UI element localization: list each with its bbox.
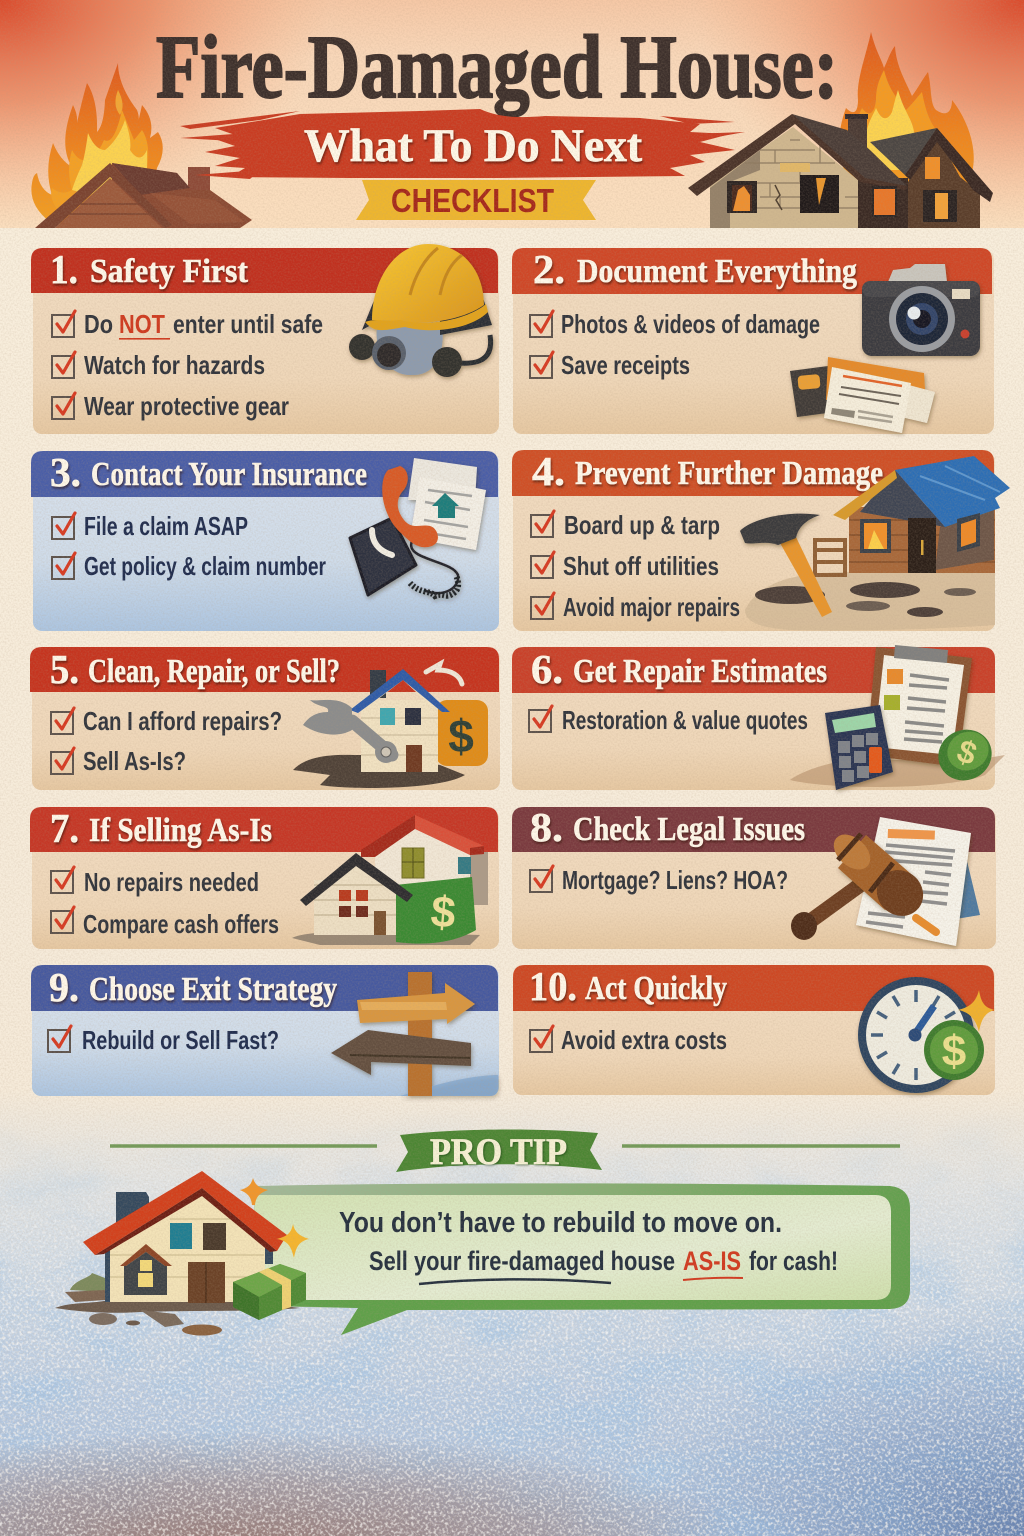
checklist: Restoration & value quotes [562,705,808,735]
checklist [530,865,788,895]
speech bubble [250,1183,910,1335]
heading: Clean, Repair, or Sell? [88,653,340,690]
subtitle: What To Do Next [304,120,642,172]
icon: two houses and cash: $ [429,887,458,938]
subtitle brush stroke [180,109,745,179]
ground [55,1300,300,1313]
heading: Choose Exit Strategy [89,971,337,1008]
header bar [30,647,499,692]
page background [0,1118,1024,1536]
checklist: Mortgage? Liens? HOA? [562,865,788,895]
header bar [512,807,995,852]
heading: 1. [50,246,78,292]
heading [50,449,367,495]
heading [532,448,883,494]
icon: camera [862,264,980,356]
checklist: Avoid major repairs [563,592,740,622]
heading: 4. [532,448,565,494]
icon: house wrench money [293,664,488,788]
checklist [51,867,279,939]
heading: 8. [530,804,563,850]
panel 6: get repair estimates [512,645,1005,790]
panel 8: check legal issues [512,804,996,949]
title: Fire-Damaged House: [156,18,838,117]
icon: clock and coin: $ [942,1027,966,1076]
checklist: Can I afford repairs? [83,706,282,736]
checklist [529,705,808,735]
checklist [530,309,820,380]
heading: 2. [533,246,565,292]
header bar [31,451,498,497]
panel 10: act quickly [513,963,995,1095]
checklist: Shut off utilities [563,551,719,581]
heading: 9. [49,964,79,1010]
checklist: No repairs needed [84,867,259,897]
heading: Document Everything [577,253,857,290]
panel 4: prevent further damage [512,448,1010,631]
window [727,157,957,222]
checklist: Save receipts [561,350,690,380]
heading: Safety First [90,253,249,290]
checklist: Board up & tarp [564,510,720,540]
checklist: NOT [119,309,165,339]
tip text: AS-IS [683,1246,741,1276]
header bar [31,965,498,1011]
checklist: Wear protective gear [84,391,289,421]
heading [530,804,805,850]
heading [50,805,272,851]
panel 5: clean repair or sell [30,646,500,790]
heading: Act Quickly [585,970,727,1007]
tip text [339,1207,838,1284]
checklist: Do [84,309,113,339]
icon: clipboard calculator coin [790,645,1005,790]
icon: house with cash [55,1171,309,1336]
checklist [48,1025,279,1055]
checklist ribbon: CHECKLIST [391,182,554,219]
heading: Prevent Further Damage [575,455,883,492]
header band [0,0,1024,228]
right burning house [688,114,993,228]
checklist: File a claim ASAP [84,511,248,541]
checklist [52,511,326,581]
heading [50,646,340,692]
heading [533,246,857,292]
header bar [512,248,992,294]
icon: documents [790,357,935,433]
checklist: enter until safe [173,309,323,339]
heading: If Selling As-Is [89,812,272,849]
heading: 7. [50,805,79,851]
icon: telephone with documents [350,458,486,596]
pro tip banner: PRO TIP [430,1132,567,1173]
tip text: Sell your fire-damaged house [369,1246,675,1276]
icon: clock and coin [858,977,995,1093]
heading: Contact Your Insurance [91,456,367,493]
pro tip banner [110,1129,900,1173]
heading: 6. [531,646,563,692]
heading: 10. [529,963,577,1009]
checklist: Photos & videos of damage [561,309,820,339]
checklist: Compare cash offers [83,909,279,939]
icon: two houses and cash [292,815,488,945]
heading [531,646,827,692]
heading [50,246,249,292]
heading: Check Legal Issues [573,811,805,848]
icon: wooden signpost [331,972,498,1096]
icon: gavel and document [791,817,980,946]
checklist [52,309,323,421]
icon: house wrench money: $ [448,710,474,762]
panel 7: if selling as-is [30,805,499,949]
panel 2: document everything [512,246,994,434]
heading [49,964,337,1010]
header bar [512,450,994,496]
panel 1: safety first [31,244,499,434]
tip text: You don’t have to rebuild to move on. [339,1207,782,1239]
panel 3: contact your insurance [31,449,499,631]
icon: boarded house and hammer [740,456,1010,630]
icon: clipboard calculator coin: $ [953,732,982,772]
header bar [512,647,995,693]
checklist [531,510,740,622]
heading [529,963,727,1009]
left house [35,163,252,228]
left flames [31,63,163,225]
checklist: Sell As-Is? [83,746,186,776]
tip text: for cash! [749,1246,838,1276]
icon: hard hat and respirator [349,244,492,377]
right flames [839,32,974,220]
heading: Get Repair Estimates [573,653,827,690]
checklist [530,1025,727,1055]
checklist [51,706,282,776]
header bar [31,248,498,293]
header bar [513,965,994,1011]
checklist: Get policy & claim number [84,551,326,581]
ground [745,568,995,630]
header bar [30,807,498,852]
checklist: Rebuild or Sell Fast? [82,1025,279,1055]
panel 9: choose exit strategy [31,964,499,1096]
heading: 3. [50,449,81,495]
heading: 5. [50,646,79,692]
checklist: Watch for hazards [84,350,265,380]
checklist: Avoid extra costs [561,1025,727,1055]
